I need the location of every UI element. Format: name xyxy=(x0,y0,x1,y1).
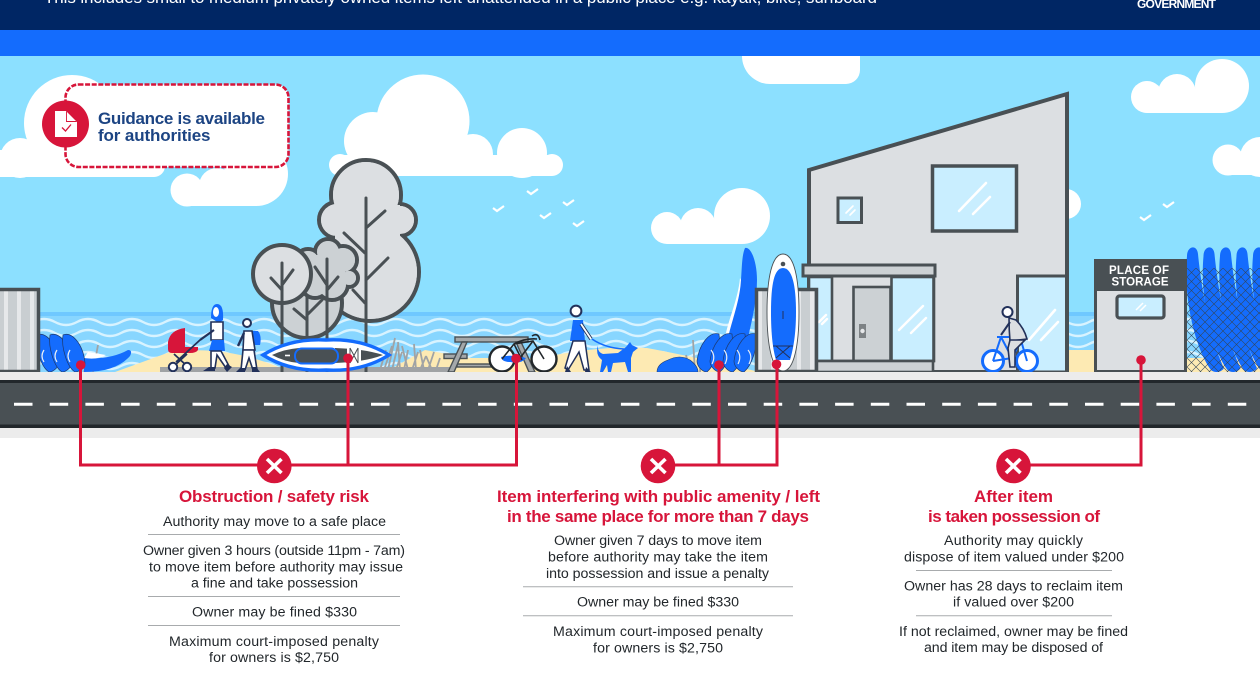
text block: 7 days: before authority may take the item xyxy=(548,550,768,566)
stroller xyxy=(168,328,200,371)
heading: is taken possession of xyxy=(928,507,1100,526)
text block: dispose xyxy=(904,533,1124,566)
text block: penalty xyxy=(553,624,764,657)
bicycle xyxy=(490,335,556,372)
picnic table xyxy=(444,337,535,372)
dog xyxy=(597,342,638,372)
round tree behind xyxy=(272,268,342,372)
connector lines left xyxy=(80,358,516,465)
panel: obstruction xyxy=(143,487,405,666)
heading: in the same place for more than 7 days xyxy=(507,507,809,526)
person with stroller xyxy=(168,304,261,372)
kayaks left group xyxy=(37,334,131,372)
water with waves xyxy=(0,312,1260,374)
clouds xyxy=(0,56,1260,244)
heading xyxy=(497,487,820,526)
text block: move: Authority may move to a safe place xyxy=(163,514,386,530)
text block: not reclaimed: and item may be disposed of xyxy=(924,640,1103,656)
text block: dispose: Authority may quickly xyxy=(944,533,1084,549)
right window xyxy=(1018,276,1066,372)
ground floor front xyxy=(803,265,935,372)
shed centre xyxy=(756,290,816,372)
sky xyxy=(0,56,1260,316)
birds xyxy=(493,189,1174,226)
pavement and road xyxy=(0,372,1260,438)
callout text xyxy=(98,109,265,145)
text block: penalty: Maximum court-imposed penalty xyxy=(169,634,380,650)
text block: not reclaimed: If not reclaimed, owner may be fined xyxy=(899,624,1128,640)
text block: not reclaimed xyxy=(899,624,1128,656)
text block: 3 hours: Owner given 3 hours (outside 11pm - 7am) xyxy=(143,543,405,559)
small circular tree xyxy=(253,245,311,372)
storage window xyxy=(1117,296,1164,318)
icon: cross middle xyxy=(641,449,675,483)
place of storage building xyxy=(1094,259,1187,372)
small window xyxy=(838,198,862,222)
storage sign: PLACE OF xyxy=(1109,265,1169,277)
icon: cross left xyxy=(257,449,292,483)
boards behind fence xyxy=(1186,247,1260,372)
text block: 3 hours: to move item before authority may issue xyxy=(149,560,403,576)
panel: after possession xyxy=(899,487,1128,656)
text block: 3 hours xyxy=(143,543,405,592)
lying kayak xyxy=(84,350,131,372)
text block: dispose: dispose of item valued under $200 xyxy=(904,550,1124,566)
heading: Obstruction / safety risk xyxy=(179,487,370,506)
text block: 3 hours: a fine and take possession xyxy=(191,576,358,592)
callout text: Guidance is available xyxy=(98,109,265,128)
kayaks right group xyxy=(657,248,757,372)
text block: reclaim xyxy=(904,579,1123,611)
text block: 7 days: Owner given 7 days to move item xyxy=(554,533,762,549)
scalloped tree xyxy=(295,239,358,372)
woman xyxy=(200,304,232,372)
icon: document xyxy=(42,100,89,148)
heading: Item interfering with public amenity / left xyxy=(497,487,820,506)
text block: reclaim: Owner has 28 days to reclaim item xyxy=(904,579,1123,595)
text block: fine: Owner may be fined $330 xyxy=(577,595,739,611)
blue band xyxy=(0,30,1260,56)
header band xyxy=(0,0,1260,30)
beach grass xyxy=(84,338,701,372)
icon: cross right xyxy=(996,449,1031,483)
connector line right xyxy=(1013,360,1141,465)
connector lines middle xyxy=(658,364,777,465)
text block: 7 days xyxy=(546,533,770,582)
text block: penalty: for owners is $2,750 xyxy=(209,650,339,666)
child xyxy=(236,319,261,372)
wall xyxy=(809,94,1067,372)
text block: reclaim: if valued over $200 xyxy=(953,595,1074,611)
sand dunes xyxy=(115,347,1260,374)
dome kayak xyxy=(657,357,698,372)
heading: After item xyxy=(974,487,1053,506)
panel: public amenity xyxy=(497,487,820,657)
storage sign: STORAGE xyxy=(1112,276,1169,288)
walker xyxy=(565,306,591,372)
building xyxy=(803,94,1067,372)
callout: guidance xyxy=(42,84,288,167)
storage sign xyxy=(1109,265,1169,288)
big tree xyxy=(319,160,419,372)
steps xyxy=(815,361,933,372)
text block: penalty xyxy=(169,634,380,666)
trees xyxy=(253,160,419,372)
cyclist xyxy=(982,307,1038,372)
person walking dog xyxy=(565,306,638,372)
kayak on ground xyxy=(263,340,389,370)
chain-link fence xyxy=(1187,268,1260,373)
text block: penalty: for owners is $2,750 xyxy=(593,641,723,657)
text block: fine: Owner may be fined $330 xyxy=(192,605,357,621)
heading xyxy=(928,487,1100,526)
leaning kayak xyxy=(725,278,741,338)
upper window xyxy=(932,166,1016,231)
canopy xyxy=(803,265,935,276)
shed left xyxy=(0,290,38,372)
text block: penalty: Maximum court-imposed penalty xyxy=(553,624,764,640)
marker dots xyxy=(76,354,1146,370)
text block: 7 days: into possession and issue a penalty xyxy=(546,566,770,582)
door xyxy=(854,287,890,361)
callout text: for authorities xyxy=(98,126,210,145)
paddle board xyxy=(767,254,799,371)
lead xyxy=(592,339,624,349)
